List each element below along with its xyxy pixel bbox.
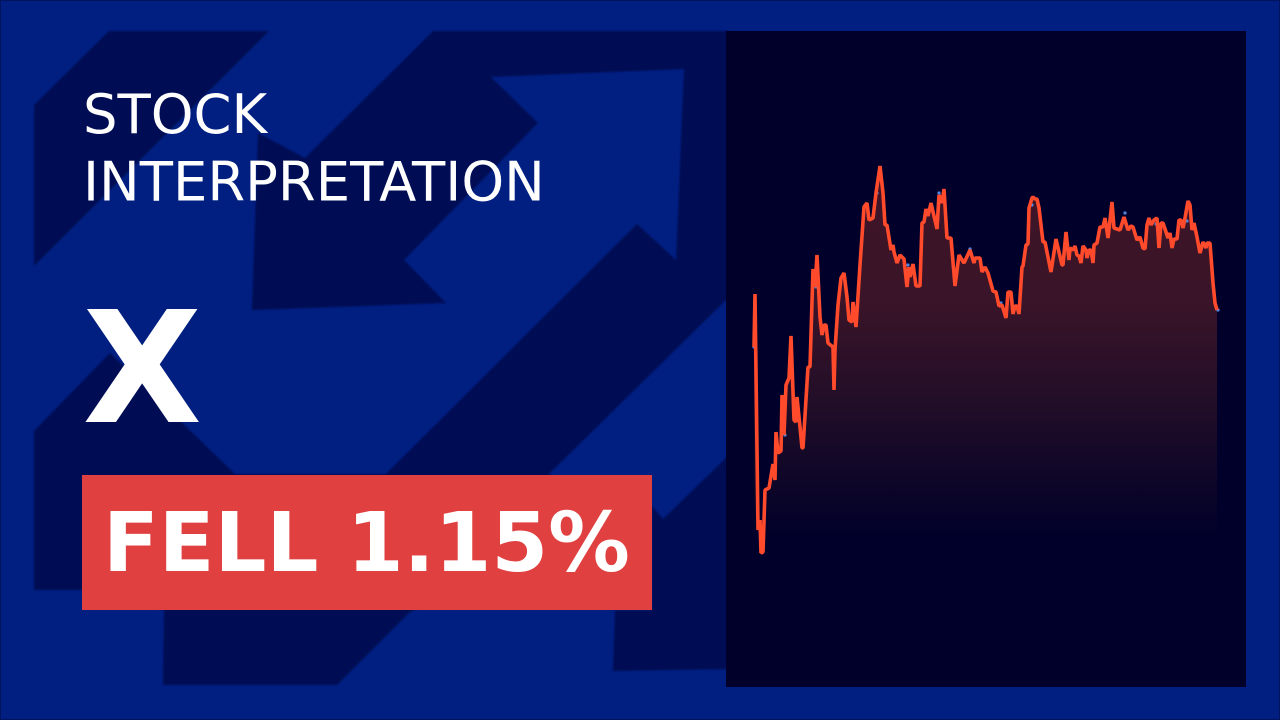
data point markers bbox=[752, 191, 1220, 437]
change badge bbox=[82, 475, 652, 610]
background arrows bbox=[34, 31, 728, 685]
title: STOCK bbox=[83, 83, 267, 146]
area under price line bbox=[754, 166, 1217, 553]
ticker symbol: X bbox=[82, 278, 202, 459]
change badge: FELL 1.15% bbox=[103, 496, 630, 591]
price line bbox=[754, 166, 1217, 553]
title: INTERPRETATION bbox=[83, 150, 545, 214]
chart panel bbox=[726, 31, 1246, 687]
